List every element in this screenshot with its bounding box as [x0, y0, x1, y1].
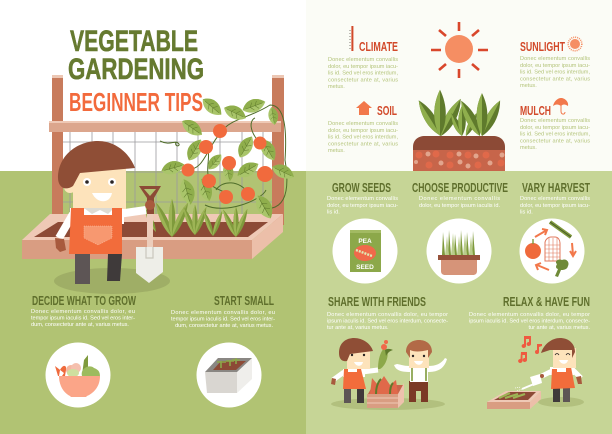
section: sunlight: SUNLIGHT	[520, 40, 565, 54]
title	[68, 25, 204, 117]
icon: potted grass	[438, 230, 480, 275]
section: sunlight: lis id. Sed vel eros interdum,	[520, 70, 590, 76]
section: start small	[171, 294, 275, 408]
section: vary harvest	[520, 181, 590, 284]
section: climate: consectetur ante at, varius	[328, 77, 398, 83]
title: BEGINNER TIPS	[69, 87, 203, 117]
section: soil: metus.	[328, 148, 345, 154]
section: grow seeds: dolor, eu tempor ipsum iacu-	[327, 203, 398, 209]
icon: umbrella	[553, 98, 568, 114]
section: choose productive: CHOOSE PRODUCTIVE	[412, 181, 508, 195]
section: sunlight: dolor, eu tempor ipsum iacu-	[520, 63, 590, 69]
section: soil: lis id. Sed vel eros interdum,	[328, 135, 398, 141]
icon: small planter box	[205, 358, 252, 393]
illustration: gardener watering with music notes	[487, 336, 584, 409]
section: start small: Donec elementum convallis dolor, eu	[171, 310, 275, 316]
section: mulch: Donec elementum convallis	[520, 118, 590, 124]
title: GARDENING	[68, 53, 204, 86]
section: decide what to grow: dum, consectetur ante at, varius metus.	[31, 322, 129, 328]
section: share with friends	[327, 295, 448, 331]
icon: thermometer	[350, 26, 353, 51]
section: share with friends: tur ante at, varius metus.	[327, 325, 389, 331]
icon: house	[356, 101, 372, 115]
section: climate: lis id. Sed vel eros interdum,	[328, 71, 398, 77]
section: vary harvest: Donec elementum convallis	[520, 196, 590, 202]
section: decide what to grow: tempor ipsum iaculis id. Sed vel eros inter-	[31, 316, 135, 322]
section: mulch: MULCH	[520, 104, 551, 118]
section: decide what to grow: Donec elementum convallis dolor, eu	[31, 309, 135, 315]
section: relax and have fun: Donec elementum convallis dolor, eu tempor	[469, 312, 590, 318]
icon: harvest cycle	[525, 222, 576, 277]
section: climate: dolor, eu tempor ipsum iacu-	[328, 64, 398, 70]
section: grow seeds: GROW SEEDS	[332, 181, 391, 195]
section: soil	[328, 101, 398, 154]
section: climate	[328, 26, 398, 90]
section: share with friends: ipsum iaculis id. Sed vel eros interdum, consecte-	[327, 319, 448, 325]
icon: large sun	[431, 22, 488, 78]
icon: seed packet	[350, 230, 381, 272]
section: relax and have fun: ipsum iaculis id. Sed vel eros interdum, consecte-	[469, 319, 590, 325]
section: mulch: dolor, eu tempor ipsum iacu-	[520, 125, 590, 131]
section: start small: dum, consectetur ante at, varius metus.	[175, 323, 273, 329]
section: vary harvest: lis id.	[520, 210, 533, 216]
section: start small: START SMALL	[214, 294, 274, 308]
illustration: seedlings in bed	[143, 199, 250, 238]
section: grow seeds: lis id.	[327, 210, 340, 216]
section: decide what to grow	[31, 294, 136, 408]
section: mulch: lis id. Sed vel eros interdum,	[520, 132, 590, 138]
icon: small sun	[568, 37, 582, 51]
section: soil: dolor, eu tempor ipsum iacu-	[328, 128, 398, 134]
icon: vegetable bowl	[55, 355, 100, 397]
section: choose productive: dolor, eu tempor ipsum iaculis id.	[419, 203, 500, 209]
section: relax and have fun: tur ante at, varius metus.	[528, 325, 590, 331]
section: share with friends: Donec elementum convallis dolor, eu tempor	[327, 312, 448, 318]
section: climate: metus.	[328, 84, 345, 90]
section: start small: tempor ipsum iaculis id. Sed vel eros inter-	[171, 317, 275, 323]
illustration: plant in soil	[413, 90, 505, 171]
illustration: gardener with shovel	[55, 141, 163, 284]
section: soil: Donec elementum convallis	[328, 121, 398, 127]
section: mulch: consectetur ante at, varius	[520, 138, 590, 144]
title: VEGETABLE	[70, 25, 198, 58]
section: relax and have fun	[469, 295, 590, 331]
section: sunlight: metus.	[520, 83, 537, 89]
section: grow seeds	[327, 181, 398, 284]
section: sunlight	[520, 37, 590, 89]
section: soil: SOIL	[377, 104, 397, 118]
icon: seed packet: SEED	[356, 264, 374, 271]
section: soil: consectetur ante at, varius	[328, 141, 398, 147]
section: climate: CLIMATE	[359, 40, 398, 54]
illustration: tomato plant	[160, 94, 297, 222]
section: climate: Donec elementum convallis	[328, 57, 398, 63]
section: choose productive	[412, 181, 508, 284]
section: sunlight: consectetur ante at, varius	[520, 76, 590, 82]
section: grow seeds: Donec elementum convallis	[327, 196, 398, 202]
section: vary harvest: dolor, eu tempor ipsum iacu-	[520, 203, 590, 209]
section: mulch	[520, 98, 590, 151]
illustration: two friends with crate	[331, 338, 447, 410]
section: mulch: metus.	[520, 145, 537, 151]
section: sunlight: Donec elementum convallis	[520, 56, 590, 62]
illustration: garden bed with trellis	[22, 75, 284, 294]
icon: seed packet: PEA	[358, 238, 372, 245]
section: choose productive: Donec elementum convallis	[419, 196, 500, 202]
section: decide what to grow: DECIDE WHAT TO GROW	[32, 294, 136, 308]
section: share with friends: SHARE WITH FRIENDS	[328, 295, 426, 309]
